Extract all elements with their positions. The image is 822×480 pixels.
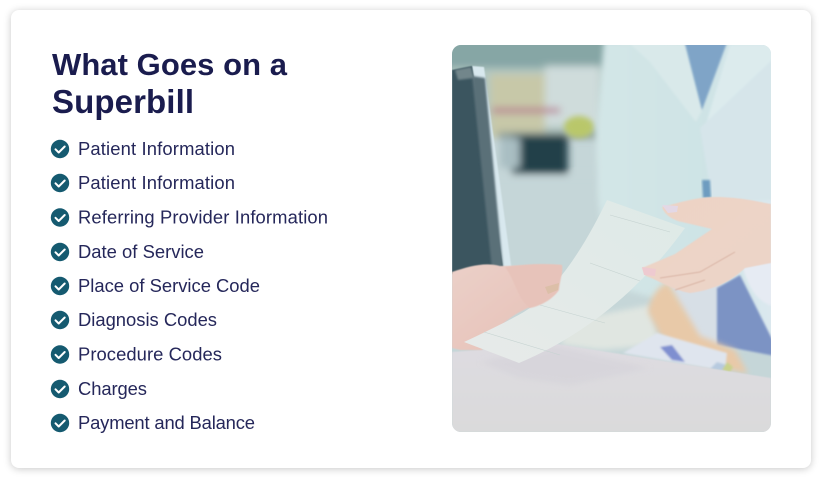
lower coat: [688, 290, 710, 336]
item: Patient Information: Patient Information: [78, 138, 235, 159]
pharmacist arm: [648, 282, 748, 374]
title: Superbill: [52, 83, 194, 120]
box on counter: [623, 333, 733, 372]
item: Date of Service: Date of Service: [78, 241, 204, 262]
checklist: [51, 138, 328, 433]
item: Diagnosis Codes: Diagnosis Codes: [78, 309, 217, 330]
counter: [452, 344, 771, 432]
lower shirt: [717, 275, 775, 356]
white cuff: [744, 264, 771, 304]
item: Referring Provider Information: Referring Provider Information: [78, 206, 328, 228]
title: What Goes on a: [52, 47, 288, 82]
item: Procedure Codes: Procedure Codes: [78, 344, 222, 364]
monitor: [472, 66, 512, 272]
patient hand: [452, 264, 530, 350]
item: Charges: Charges: [78, 378, 147, 399]
title: [52, 47, 288, 120]
superbill paper: [464, 200, 685, 363]
counter back strip: [560, 305, 660, 350]
item: Patient Information (repeat): Patient Information: [78, 172, 235, 193]
item: Payment and Balance: Payment and Balance: [78, 412, 255, 433]
patient thumb: [505, 264, 562, 308]
shirt and tie: [684, 40, 728, 110]
pharmacist hand: [642, 197, 771, 293]
pharmacist coat: [596, 40, 780, 350]
card content: [50, 45, 771, 433]
photo: handing a superbill across a pharmacy counter: [440, 35, 780, 432]
item: Place of Service Code: Place of Service Code: [78, 275, 260, 296]
